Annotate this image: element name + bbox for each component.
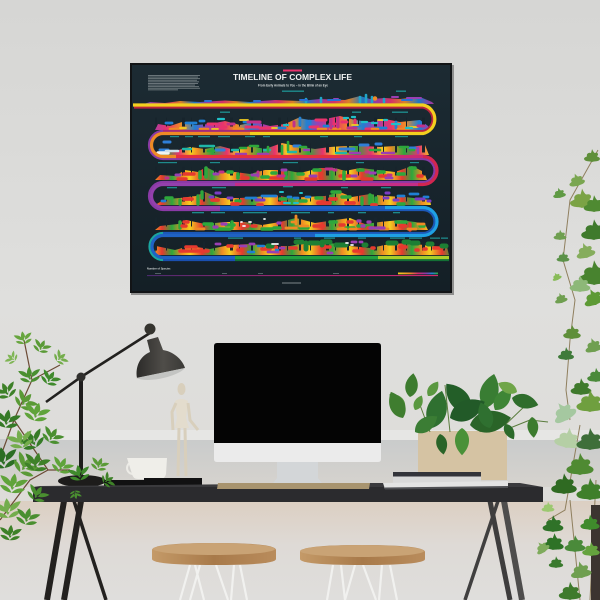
footer credit — [282, 282, 301, 284]
lamp rim — [136, 368, 185, 380]
poster frame — [130, 63, 452, 293]
lamp shade — [137, 337, 185, 378]
poster shadow — [131, 65, 454, 295]
scene row 6 — [155, 216, 430, 230]
species line — [147, 275, 438, 276]
plant stems — [420, 385, 548, 432]
timeline ribbon — [133, 105, 449, 260]
monitor chin — [214, 443, 381, 462]
cup handle — [127, 462, 139, 474]
scene row 3 — [155, 142, 430, 155]
desk legs left — [47, 501, 106, 600]
scene row 1 — [144, 95, 434, 104]
lamp base — [58, 475, 106, 487]
potted plant — [384, 372, 548, 455]
scene row 7 — [155, 242, 449, 255]
plant pot — [418, 431, 507, 480]
wall below shelf — [0, 439, 600, 487]
ivy trunk — [591, 505, 600, 600]
lamp pole — [79, 378, 83, 478]
ribbon inner line — [134, 108, 449, 260]
stool right seat — [300, 545, 425, 565]
wall shelf — [50, 430, 600, 440]
species chart heading: Number of Species — [147, 266, 171, 270]
notebook lower — [383, 481, 508, 489]
desk tray — [104, 478, 202, 488]
ribbon main line — [133, 105, 449, 258]
stool right legs — [327, 565, 397, 600]
title: TIMELINE OF COMPLEX LIFE — [233, 72, 352, 82]
figure limbs — [172, 403, 198, 476]
monitor — [214, 343, 381, 483]
subtitle: From Early Animals to You – in the Blink of an Eye — [258, 84, 328, 88]
monitor stand — [273, 461, 322, 483]
lamp — [46, 324, 185, 487]
branch leaves — [0, 330, 117, 541]
stool left seat — [152, 543, 276, 565]
lamp arm — [46, 333, 150, 402]
species axis labels — [155, 272, 339, 275]
desk top surface — [33, 483, 543, 487]
wooden figure — [172, 383, 198, 476]
lamp joints — [76, 372, 86, 382]
species rainbow bar — [398, 272, 438, 274]
woven mat — [217, 483, 370, 489]
poster background — [132, 65, 450, 291]
cup body — [127, 458, 167, 479]
pink title tag — [283, 70, 302, 72]
scene row 2 — [155, 116, 430, 130]
scene row 4 — [155, 166, 430, 180]
scene row 5 — [155, 192, 432, 205]
figure head — [178, 383, 186, 395]
poster — [130, 63, 454, 295]
branch stems — [0, 340, 70, 520]
desk legs right — [465, 501, 522, 600]
ivy leaves — [532, 149, 600, 600]
monitor screen — [214, 343, 381, 443]
right ivy plant — [532, 149, 600, 600]
intro paragraph — [148, 75, 200, 90]
desk — [33, 483, 543, 600]
notebook upper — [393, 472, 481, 483]
stool left legs — [180, 565, 247, 600]
stools — [152, 543, 425, 600]
coffee cup — [127, 458, 167, 479]
left branch plant — [0, 330, 117, 541]
ivy stems — [548, 150, 598, 600]
era labels — [158, 90, 448, 239]
notebooks — [383, 472, 508, 490]
figure torso — [175, 399, 189, 428]
desk front — [33, 487, 543, 502]
wall below desk — [0, 501, 600, 600]
